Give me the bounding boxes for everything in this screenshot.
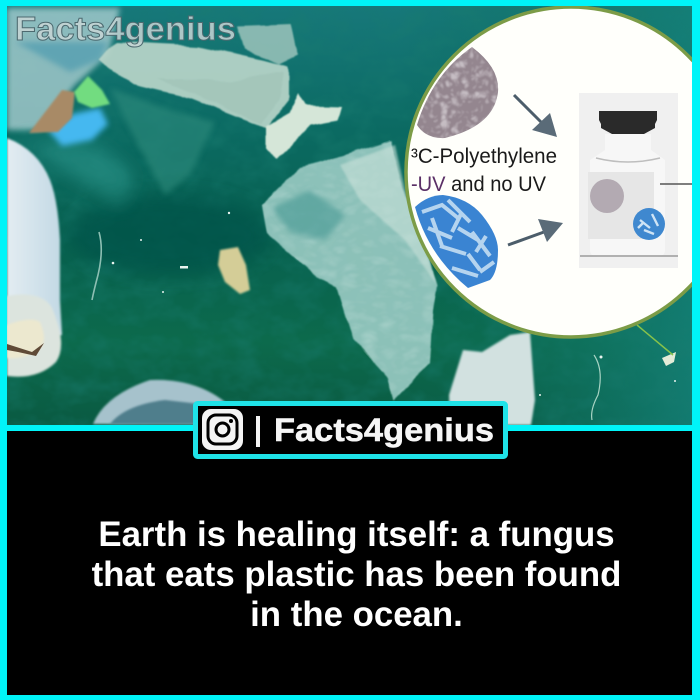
- vial panel: [579, 93, 692, 268]
- vial black cap: [599, 111, 657, 134]
- white bag lower right: [449, 332, 535, 425]
- plastic cup rim: [7, 294, 61, 377]
- green stem: [637, 325, 673, 355]
- underwater photo panel: [7, 6, 700, 425]
- circle white fill and green ring: [406, 7, 700, 337]
- white shard right: [662, 352, 676, 366]
- icon flash dot: [229, 419, 233, 423]
- icon: instagram: [202, 409, 243, 450]
- badge separator: [256, 416, 260, 447]
- top bag fold shade: [155, 72, 283, 124]
- right side water tint: [531, 22, 692, 425]
- large top plastic bag: [98, 42, 288, 128]
- vial panel background: [579, 93, 678, 268]
- watermark: Facts4genius: [15, 10, 236, 47]
- icon tile: [202, 409, 243, 450]
- thin plastic thread right: [592, 355, 600, 420]
- white shredded plastic: [266, 92, 342, 158]
- outgoing arrow line: [660, 183, 692, 185]
- upper arrow: [514, 95, 557, 137]
- central bag dark fold: [272, 190, 345, 240]
- vial blue disc: [633, 208, 665, 240]
- translucent hanging plastic: [110, 88, 215, 195]
- caption text: that eats plastic has been found: [92, 555, 621, 594]
- top blue water haze: [15, 42, 108, 72]
- caption text: in the ocean.: [250, 595, 463, 634]
- inset circle: [406, 7, 700, 337]
- icon outline: [208, 415, 237, 444]
- water background: [7, 6, 692, 425]
- blue plastic fragment: [48, 108, 108, 146]
- small white specks: [112, 212, 676, 396]
- yellow debris blob: [218, 247, 250, 294]
- cup interior: [7, 320, 44, 358]
- vial neck highlight: [596, 158, 660, 162]
- thin plastic thread left: [92, 232, 101, 300]
- vial base line: [580, 255, 678, 257]
- vial blue disc highlights: [638, 214, 658, 234]
- top left pale debris haze: [7, 8, 120, 130]
- vial label: [588, 172, 654, 239]
- UV label: -UV and no UV: [411, 173, 546, 196]
- brown item in cup: [7, 343, 44, 356]
- plastic debris group: [98, 24, 437, 400]
- central plastic bag: [262, 140, 437, 400]
- plastic cup body: [7, 138, 62, 345]
- green plastic fragment: [74, 76, 110, 108]
- polyethylene label: ³C-Polyethylene: [411, 145, 557, 168]
- black caption panel: [7, 431, 692, 695]
- badge box: [196, 404, 506, 456]
- gray polyethylene sample: [417, 47, 498, 138]
- blue polyethylene sample: [415, 195, 498, 288]
- dark upper water shade: [70, 195, 270, 275]
- pale water glow below debris: [20, 140, 135, 205]
- vial gray disc: [590, 179, 624, 213]
- water texture: [7, 165, 554, 425]
- upper right clear bag: [238, 24, 298, 64]
- caption text: [92, 515, 621, 634]
- central bag light edge: [340, 145, 437, 285]
- central bag mesh texture: [262, 140, 436, 400]
- bottom plastic bowl: [93, 380, 225, 424]
- caption text: Earth is healing itself: a fungus: [98, 515, 615, 554]
- icon lens: [216, 423, 229, 436]
- brown cardboard fragment: [29, 90, 75, 133]
- lower arrow: [508, 219, 563, 245]
- badge handle: Facts4genius: [274, 412, 494, 448]
- bowl inner shadow: [110, 400, 200, 424]
- vial glass body: [590, 134, 665, 257]
- handle badge: [196, 404, 506, 456]
